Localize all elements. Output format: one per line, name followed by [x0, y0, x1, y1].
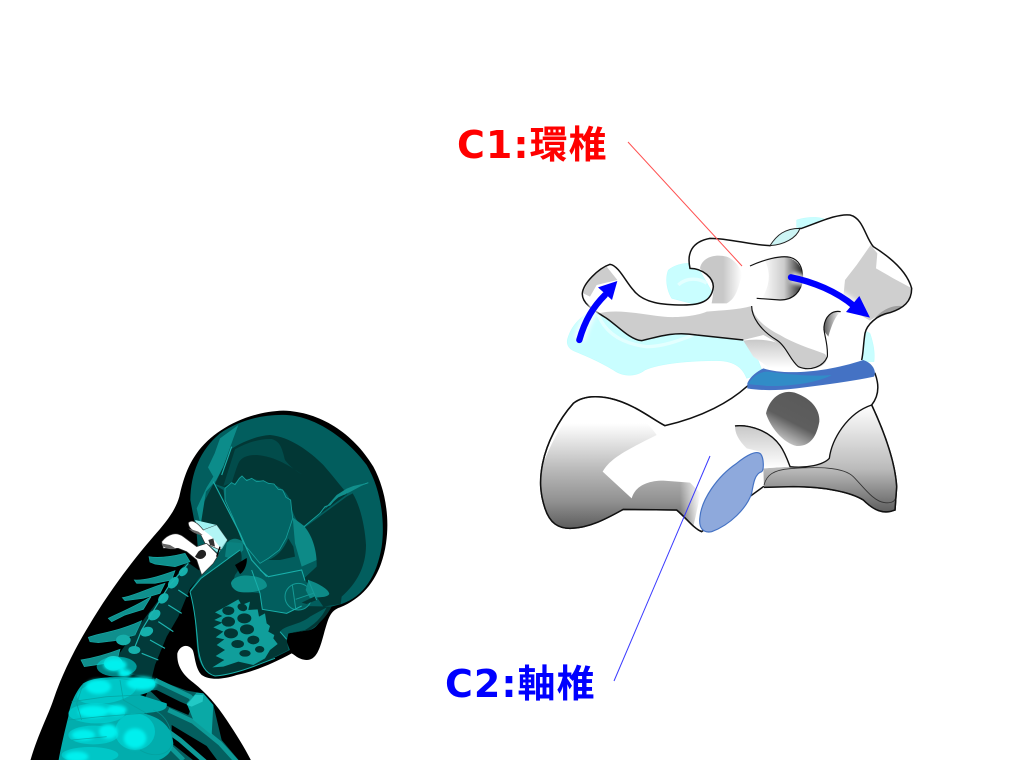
spinous processes: [81, 553, 190, 667]
rib cage: [58, 657, 240, 760]
cyan inner highlights: [598, 279, 707, 347]
right pit shading: [762, 257, 803, 300]
shoulder blade: [187, 693, 213, 735]
bright serrated plate: [197, 425, 238, 525]
left pit shading: [700, 256, 742, 303]
vertebral foramen: [766, 392, 819, 446]
notch shading: [823, 311, 841, 337]
arrow: right rotation: [791, 277, 870, 318]
spine canal band: [115, 562, 203, 678]
wing shading: [598, 306, 827, 369]
small C1 C2 vertebra: [162, 520, 227, 575]
translucent overlays: [62, 657, 155, 760]
cyan back shadow of atlas: [567, 217, 874, 378]
bone lines: [190, 550, 305, 676]
nasal cavity: [235, 558, 247, 574]
arrow: left rotation: [579, 281, 617, 340]
black gaps: [150, 690, 218, 760]
skull: [190, 415, 383, 676]
dark sliver: [268, 538, 295, 560]
chest mass: [58, 677, 173, 760]
figure: C1 atlas and C2 axis vertebrae: [541, 215, 912, 532]
bright temporal band: [293, 517, 317, 567]
blue disc: [747, 360, 875, 390]
dark crown area: [215, 435, 347, 527]
cheek bone: [231, 575, 267, 592]
cyan joint area: [195, 520, 227, 553]
C1 outline: [582, 215, 912, 360]
crown inner band: [223, 439, 302, 486]
jaw mid patch: [280, 607, 327, 639]
body silhouette: [30, 411, 387, 760]
leader line: C1: [628, 142, 742, 266]
cranium: [190, 415, 383, 675]
C2 right foot shading: [763, 405, 897, 511]
label: C1: C1:環椎: [457, 123, 608, 167]
right shading: [843, 245, 912, 321]
temporal lobe bone: [225, 476, 293, 563]
rib field: [140, 678, 240, 760]
diagonal ray: [213, 482, 267, 577]
C2 blue articular facet: [700, 453, 763, 532]
dark left wedge: [200, 484, 243, 543]
C2 inner shade: [735, 426, 790, 468]
C1 miniature: [188, 521, 227, 550]
vertebral bodies: [104, 565, 190, 671]
figure: skeleton with bowed head: [30, 411, 387, 760]
C2 body outline: [541, 373, 897, 532]
C2 axis: [541, 373, 897, 532]
C2 left wing outline: [541, 397, 702, 532]
C2 miniature: [162, 534, 218, 575]
C2 underside fade: [677, 480, 702, 530]
bone edges: [68, 680, 172, 755]
lower parietal dark: [304, 493, 366, 607]
odontoid window: [770, 228, 800, 246]
label: C2: C2:軸椎: [445, 662, 596, 706]
rib bands: [150, 680, 237, 760]
dark face area: [190, 550, 332, 676]
chest highlights: [65, 659, 157, 760]
C2 left wing shading: [541, 397, 701, 528]
zygoma circle: [285, 580, 329, 610]
leader line: C2: [614, 456, 710, 681]
C1 body outline: [582, 215, 912, 373]
spine: [81, 553, 203, 678]
suture line: [304, 483, 368, 527]
C1 atlas: [582, 215, 912, 390]
teeth: [212, 599, 278, 667]
